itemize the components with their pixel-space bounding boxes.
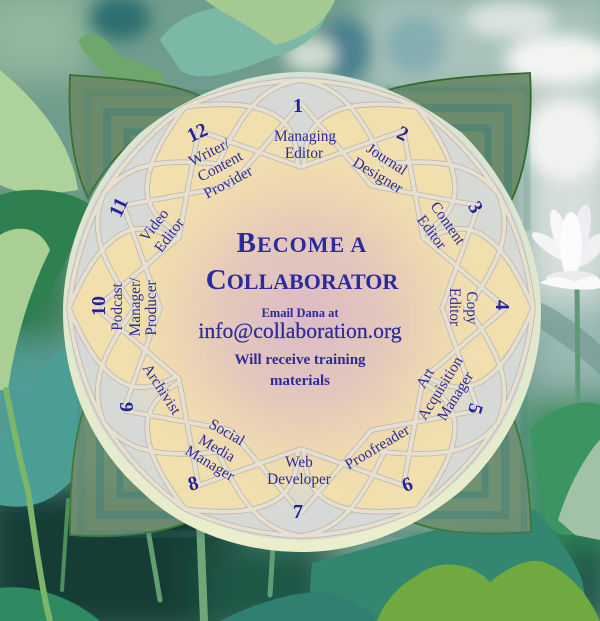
role 5: Art Acquisition Manager: Art [413, 365, 438, 391]
role 11: Video Editor: Video [137, 205, 173, 245]
background: pale leaf fold on left [0, 229, 50, 390]
role 10: Podcast Manager/Producer: 10 [88, 296, 110, 316]
role 1: Managing Editor [274, 95, 336, 162]
role 4: Copy Editor: Copy [463, 291, 480, 325]
decorative corner leaf: top right [388, 73, 531, 227]
role 2: Journal Designer: 2 [393, 122, 412, 146]
role 8: Social Media Manager: 8 [186, 472, 201, 496]
role 5: Art Acquisition Manager: Acquisition [414, 353, 467, 423]
role 11: Video Editor [105, 194, 188, 256]
background: top-left small leaf [78, 35, 165, 82]
role 4: Copy Editor: 4 [491, 300, 513, 310]
role 3: Content Editor: Content [427, 199, 469, 249]
background: teal leaf on lower left [0, 345, 80, 507]
background: stems [6, 285, 578, 621]
role 12: Writer/Content Provider: 12 [184, 119, 211, 147]
background: left pale leaf [0, 70, 78, 193]
background: large green leaf at bottom centre [310, 510, 590, 621]
role 9: Archivist: Archivist [139, 361, 185, 418]
gold ground [73, 80, 529, 536]
role 8: Social Media Manager: Manager [182, 442, 237, 485]
role 5: Art Acquisition Manager [413, 353, 487, 424]
role 10: Podcast Manager/Producer: Manager/ [127, 277, 144, 336]
role 1: Managing Editor: 1 [293, 95, 303, 117]
role 2: Journal Designer: Designer [350, 154, 406, 197]
role 10: Podcast Manager/Producer [88, 277, 160, 336]
role 12: Writer/Content Provider: Writer/ [186, 135, 233, 170]
role 9: Archivist [115, 361, 185, 418]
decorative corner leaf: bottom left [70, 396, 219, 536]
role 5: Art Acquisition Manager: Manager [434, 369, 477, 424]
role 7: Web Developer: Web [285, 454, 313, 471]
role 8: Social Media Manager: Social [206, 416, 248, 449]
role 9: Archivist: 9 [115, 402, 137, 412]
icon: white lotus flower [528, 203, 600, 290]
role 6: Proofreader [342, 422, 416, 497]
pink centre glow [115, 130, 495, 510]
role 10: Podcast Manager/Producer: Producer [143, 280, 160, 336]
role 6: Proofreader: Proofreader [342, 422, 413, 473]
role 1: Managing Editor: Managing [274, 128, 336, 145]
role 3: Content Editor: 3 [463, 198, 487, 217]
role 4: Copy Editor: Editor [446, 288, 463, 326]
grey sectors [42, 76, 560, 540]
role 12: Writer/Content Provider: Content [195, 147, 246, 185]
role 1: Managing Editor: Editor [285, 145, 323, 162]
background: top leaf highlight [205, 0, 335, 45]
background: right green leaf [530, 403, 600, 535]
background: teal leaf at bottom [220, 592, 375, 621]
role 2: Journal Designer: Journal [363, 140, 410, 179]
role 7: Web Developer: Developer [267, 471, 331, 488]
decorative corner leaf: bottom right [386, 396, 531, 534]
role 7: Web Developer [267, 454, 331, 523]
role 3: Content Editor [413, 198, 487, 253]
contact text: Email Dana at [261, 306, 339, 320]
contact text [198, 306, 402, 389]
role 10: Podcast Manager/Producer: Podcast [109, 282, 126, 331]
role 12: Writer/Content Provider: Provider [201, 163, 256, 202]
role 12: Writer/Content Provider [184, 119, 256, 202]
contact text: info@collaboration.org [198, 319, 402, 343]
heading: COLLABORATOR [206, 264, 399, 296]
role 5: Art Acquisition Manager: 5 [463, 401, 487, 416]
circular wheel panel [42, 72, 560, 552]
role 6: Proofreader: 6 [399, 473, 416, 497]
outer disc [63, 72, 541, 552]
background: soft leaf behind stem on right [535, 300, 600, 375]
role 11: Video Editor: Editor [151, 215, 188, 256]
decorative corner leaf: top left [70, 75, 226, 231]
role 8: Social Media Manager: Media [196, 431, 238, 466]
contact text: Will receive training [234, 352, 366, 368]
role 7: Web Developer: 7 [293, 501, 303, 523]
heading: BECOME A [237, 227, 367, 259]
role 11: Video Editor: 11 [105, 194, 133, 221]
twelve-fold knot pattern [46, 80, 556, 536]
role 2: Journal Designer [350, 122, 412, 197]
background: top central leaf [160, 0, 330, 76]
heading [206, 227, 399, 296]
background: bright green leaf at bottom right [377, 561, 600, 621]
role 8: Social Media Manager [182, 416, 248, 496]
role 3: Content Editor: Editor [413, 212, 450, 253]
role 4: Copy Editor [446, 288, 513, 326]
contact text: materials [270, 373, 330, 389]
background: bottom left leaf [0, 587, 100, 621]
background: dark green leaf on left [0, 190, 90, 345]
background: pale leaf on right [558, 440, 600, 540]
